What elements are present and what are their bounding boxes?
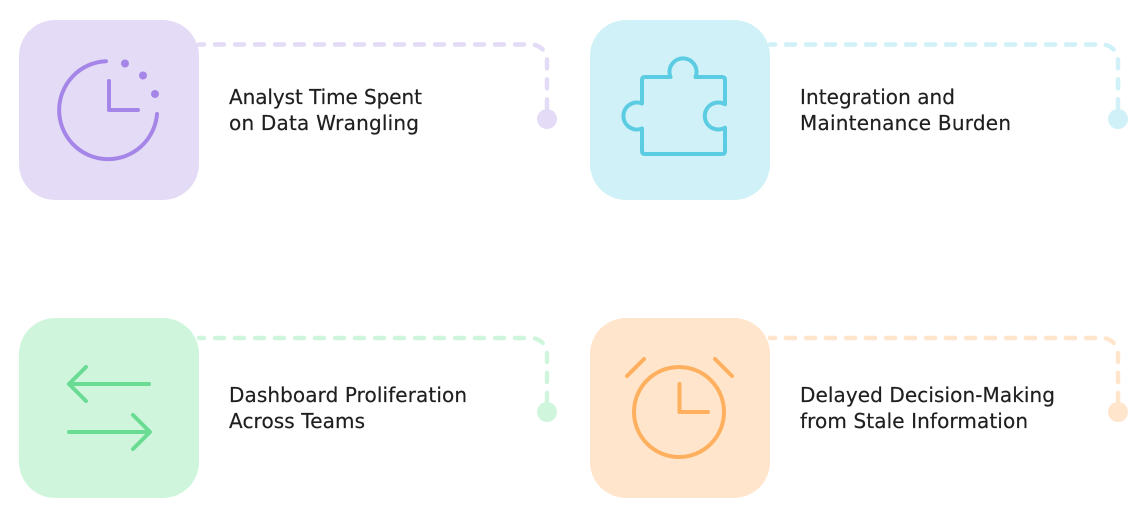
icon: opposing arrows: [69, 367, 150, 449]
label: delayed decisions: Delayed Decision-Making: [800, 383, 1055, 407]
icon: alarm clock: [627, 359, 732, 457]
label: analyst time: on Data Wrangling: [229, 111, 419, 135]
icon: clock with dots: [59, 60, 159, 159]
label: dashboards: Dashboard Proliferation: [229, 383, 467, 407]
card: cyan: [590, 20, 770, 200]
connector: cyan: [770, 44, 1128, 129]
card: purple: [19, 20, 199, 200]
panel: delayed decisions: [590, 318, 1128, 498]
label: analyst time: Analyst Time Spent: [229, 85, 422, 109]
panel: dashboards: [19, 318, 557, 498]
panel: analyst time: [19, 20, 557, 200]
label: delayed decisions: from Stale Information: [800, 409, 1028, 433]
label: integration: Integration and: [800, 85, 955, 109]
card: orange: [590, 318, 770, 498]
icon: puzzle piece: [623, 58, 725, 154]
panel: integration: [590, 20, 1128, 200]
connector: green: [199, 338, 557, 422]
connector: orange: [770, 338, 1128, 422]
card: green: [19, 318, 199, 498]
label: dashboards: Across Teams: [229, 409, 365, 433]
connector: purple: [199, 44, 557, 129]
label: integration: Maintenance Burden: [800, 111, 1011, 135]
